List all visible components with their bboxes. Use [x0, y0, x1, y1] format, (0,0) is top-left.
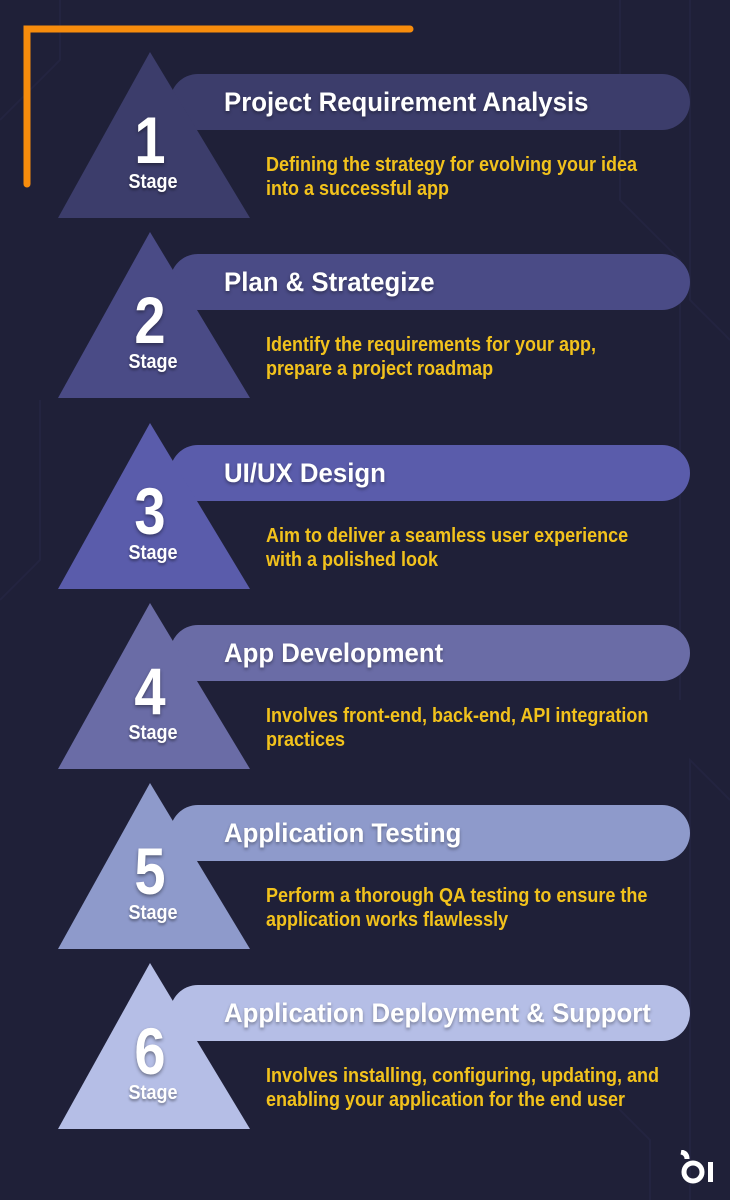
label 2: Stage — [128, 351, 178, 373]
stage 2 — [58, 232, 690, 398]
label 6: Stage — [128, 1082, 178, 1104]
desc 2: Identify the requirements for your app, — [266, 334, 596, 356]
desc 1: Defining the strategy for evolving your idea — [266, 154, 637, 176]
label 5: Stage — [128, 902, 178, 924]
title 4: App Development — [224, 638, 443, 668]
number 1: 1 — [134, 103, 166, 177]
desc 3: with a polished look — [266, 549, 438, 571]
triangle 4 — [58, 603, 250, 769]
number 2: 2 — [134, 283, 166, 357]
title 2: Plan & Strategize — [224, 267, 435, 297]
triangle 3 — [58, 423, 250, 589]
desc 6: Involves installing, configuring, updating, and — [266, 1065, 659, 1087]
pill 5 — [170, 805, 690, 861]
desc 2 — [266, 334, 596, 380]
desc 3: Aim to deliver a seamless user experience — [266, 525, 628, 547]
triangle 5 — [58, 783, 250, 949]
desc 4: practices — [266, 729, 345, 751]
title 1: Project Requirement Analysis — [224, 87, 588, 117]
pill 3 — [170, 445, 690, 501]
orange corner bracket — [24, 26, 414, 188]
desc 5: application works flawlessly — [266, 909, 508, 931]
stage 1 — [58, 52, 690, 218]
title 6: Application Deployment & Support — [224, 998, 651, 1028]
pill 2 — [170, 254, 690, 310]
pill 1 — [170, 74, 690, 130]
pill 6 — [170, 985, 690, 1041]
label 1: Stage — [128, 171, 178, 193]
desc 6: enabling your application for the end user — [266, 1089, 625, 1111]
desc 1 — [266, 154, 638, 200]
triangle 1 — [58, 52, 250, 218]
logo — [680, 1150, 713, 1184]
stage 4 — [58, 603, 690, 769]
title 3: UI/UX Design — [224, 458, 386, 488]
desc 1: into a successful app — [266, 178, 449, 200]
triangle 2 — [58, 232, 250, 398]
desc 6 — [266, 1065, 659, 1111]
label 3: Stage — [128, 542, 178, 564]
number 6: 6 — [134, 1014, 166, 1088]
pill 4 — [170, 625, 690, 681]
number 5: 5 — [134, 834, 166, 908]
desc 5: Perform a thorough QA testing to ensure the — [266, 885, 647, 907]
stage 5 — [58, 783, 690, 949]
desc 4: Involves front-end, back-end, API integration — [266, 705, 648, 727]
number 3: 3 — [134, 474, 166, 548]
desc 4 — [266, 705, 648, 751]
desc 3 — [266, 525, 628, 571]
number 4: 4 — [134, 654, 166, 728]
triangle 6 — [58, 963, 250, 1129]
desc 2: prepare a project roadmap — [266, 358, 493, 380]
stage 3 — [58, 423, 690, 589]
label 4: Stage — [128, 722, 178, 744]
stage 6 — [58, 963, 690, 1129]
title 5: Application Testing — [224, 818, 461, 848]
desc 5 — [266, 885, 647, 931]
